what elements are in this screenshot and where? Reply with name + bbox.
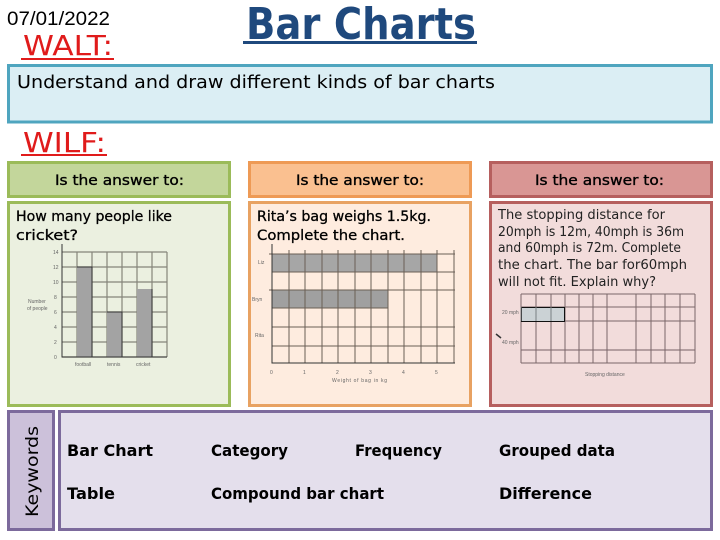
bar chart: bag weights [252, 244, 455, 384]
bar chart: stopping distances: 20 mph [502, 310, 519, 316]
panel: WALT objective [8, 66, 712, 122]
date: 07/01/2022 [7, 8, 110, 30]
question text: 20mph is 12m, 40mph is 36m [498, 225, 684, 240]
question text: the chart. The bar for60mph [498, 258, 687, 273]
bar chart: bag weights: 3 [369, 370, 372, 376]
keyword: Table: Table [67, 484, 115, 503]
bar chart: bag weights: Bryn [252, 297, 262, 303]
panel: stopping distance question [490, 202, 712, 406]
panel: cricket question [8, 202, 230, 406]
bar chart: bag weights: 5 [435, 370, 438, 376]
bar chart: favourite sports: 0 [54, 355, 57, 361]
bar chart: bag weights: 4 [402, 370, 405, 376]
keyword: Category: Category [211, 441, 289, 460]
panel: keywords label [8, 412, 54, 530]
bar chart: favourite sports: 2 [54, 340, 57, 346]
bar chart: bag weights: Rita [255, 333, 264, 339]
header: red: Is the answer to: [535, 173, 664, 189]
question text: will not fit. Explain why? [498, 275, 656, 290]
title: Bar Charts [246, 0, 476, 50]
header: green [8, 162, 230, 196]
question text: Complete the chart. [257, 228, 405, 244]
bar chart: favourite sports: 10 [53, 280, 59, 286]
bar chart: favourite sports: 8 [54, 295, 57, 301]
keyword: Difference: Difference [499, 484, 592, 503]
question text: How many people like [16, 209, 172, 225]
bar chart: favourite sports: of people [27, 306, 48, 312]
bar chart: bag weights: 2 [336, 370, 339, 376]
panel: keywords list [60, 412, 712, 530]
keyword: Frequency: Frequency [355, 441, 443, 460]
bar chart: bag weights: 1 [303, 370, 306, 376]
panel: bag weight question [250, 202, 470, 406]
bar chart: bag weights: Weight of bag in kg [332, 378, 387, 384]
bar chart: favourite sports: 6 [54, 310, 57, 316]
bar chart: stopping distances: 40 mph [502, 340, 519, 346]
bar chart: stopping distances [496, 294, 695, 378]
bar chart: bag weights: Liz [258, 260, 265, 266]
heading: WILF: WILF: [23, 126, 106, 159]
panel: keywords label: Keywords [23, 426, 43, 517]
bar chart: favourite sports: 12 [53, 265, 59, 271]
bar chart: favourite sports: football [75, 362, 91, 368]
keyword: Compound bar chart: Compound bar chart [211, 484, 384, 503]
bar chart: favourite sports: tennis [107, 362, 121, 368]
bar chart: stopping distances: Stopping distance [585, 372, 625, 378]
bar chart: favourite sports [27, 244, 167, 368]
bar chart: favourite sports: 14 [53, 250, 59, 256]
question text: The stopping distance for [497, 208, 666, 223]
header: orange: Is the answer to: [296, 173, 424, 189]
header: orange [250, 162, 470, 196]
header: green: Is the answer to: [55, 173, 184, 189]
keyword: Grouped data: Grouped data [499, 441, 615, 460]
objective text: Understand and draw different kinds of bar charts [17, 72, 495, 93]
question text: Rita’s bag weighs 1.5kg. [257, 209, 431, 225]
keyword: Bar Chart: Bar Chart [67, 441, 153, 460]
bar chart: bag weights: 0 [270, 370, 273, 376]
bar chart: favourite sports: Number [28, 299, 46, 305]
header: red [490, 162, 712, 196]
bar chart: favourite sports: cricket [136, 362, 151, 368]
heading: WALT: WALT: [23, 29, 113, 62]
question text: and 60mph is 72m. Complete [498, 241, 681, 256]
question text: cricket? [16, 228, 78, 244]
bar chart: favourite sports: 4 [54, 325, 57, 331]
